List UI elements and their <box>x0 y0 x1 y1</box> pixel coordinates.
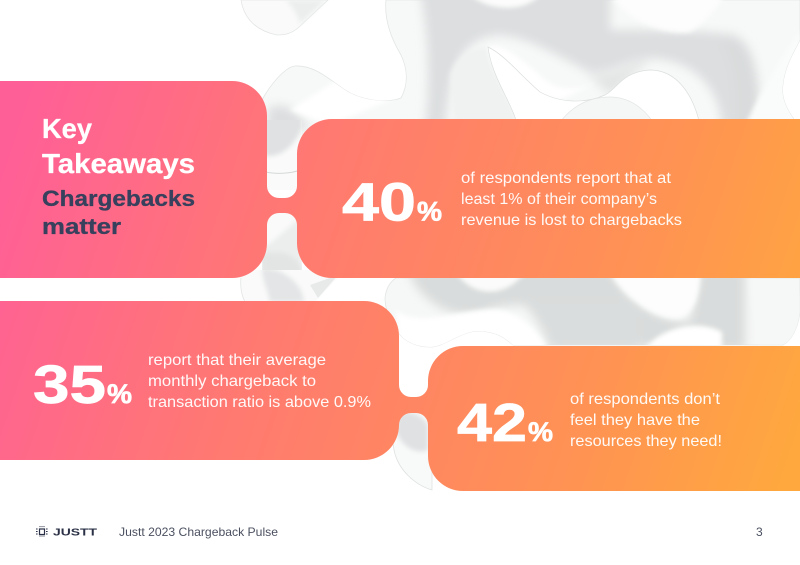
panel: 42% stat <box>410 346 800 491</box>
subheading: Chargebacks matter: matter <box>42 214 122 239</box>
text: 35% description <box>148 352 371 411</box>
stat: 40%: 40 <box>342 172 416 232</box>
panel: key takeaways heading <box>0 81 290 278</box>
subheading: Chargebacks matter: Chargebacks <box>42 186 195 211</box>
heading: Key Takeaways: Takeaways <box>42 148 195 179</box>
text: 42% description: of respondents don’t <box>570 391 721 408</box>
stat: 42%: % <box>528 417 553 447</box>
page number: 3 <box>756 525 763 539</box>
text: 42% description: resources they need! <box>570 433 722 450</box>
lower-left blob <box>240 270 345 302</box>
text: 35% description: monthly chargeback to <box>148 373 316 390</box>
heading: Key Takeaways: Key <box>42 113 92 144</box>
panel: 40% stat <box>280 119 800 278</box>
footer <box>36 525 763 539</box>
text: 35% description: report that their average <box>148 352 326 369</box>
white openings <box>612 0 725 33</box>
text: 42% description <box>570 391 722 450</box>
icon: Justt chip mark <box>36 526 48 537</box>
background: white 3D blob texture <box>240 0 800 490</box>
top blob field <box>262 0 800 135</box>
text: 40% description: least 1% of their company’s <box>461 191 657 208</box>
stat: 40%: % <box>417 196 442 226</box>
middle blob field <box>385 278 800 347</box>
main gray bands <box>420 0 749 119</box>
text: 40% description: of respondents report that at <box>461 170 672 187</box>
logo: Justt <box>36 526 97 538</box>
text: 42% description: feel they have the <box>570 412 700 429</box>
panel: 35% stat <box>0 301 420 460</box>
stat: 35% <box>33 355 132 415</box>
text: 40% description <box>461 170 682 229</box>
subheading: Chargebacks matter <box>42 186 195 239</box>
heading: Key Takeaways <box>42 113 195 179</box>
logo: Justt: JUSTT <box>53 528 97 538</box>
top-left small blob <box>241 0 328 35</box>
text: 35% description: transaction ratio is above 0.9% <box>148 394 371 411</box>
gap blob between panels one and two <box>262 120 302 270</box>
footer title: Justt 2023 Chargeback Pulse <box>119 525 278 539</box>
bottom blob near connector <box>393 410 432 490</box>
stat: 35%: % <box>107 379 132 409</box>
stat: 40% <box>342 172 442 232</box>
text: 40% description: revenue is lost to chargebacks <box>461 212 682 229</box>
stat: 42% <box>457 393 553 453</box>
stat: 42%: 42 <box>457 393 527 453</box>
stat: 35%: 35 <box>33 355 106 415</box>
